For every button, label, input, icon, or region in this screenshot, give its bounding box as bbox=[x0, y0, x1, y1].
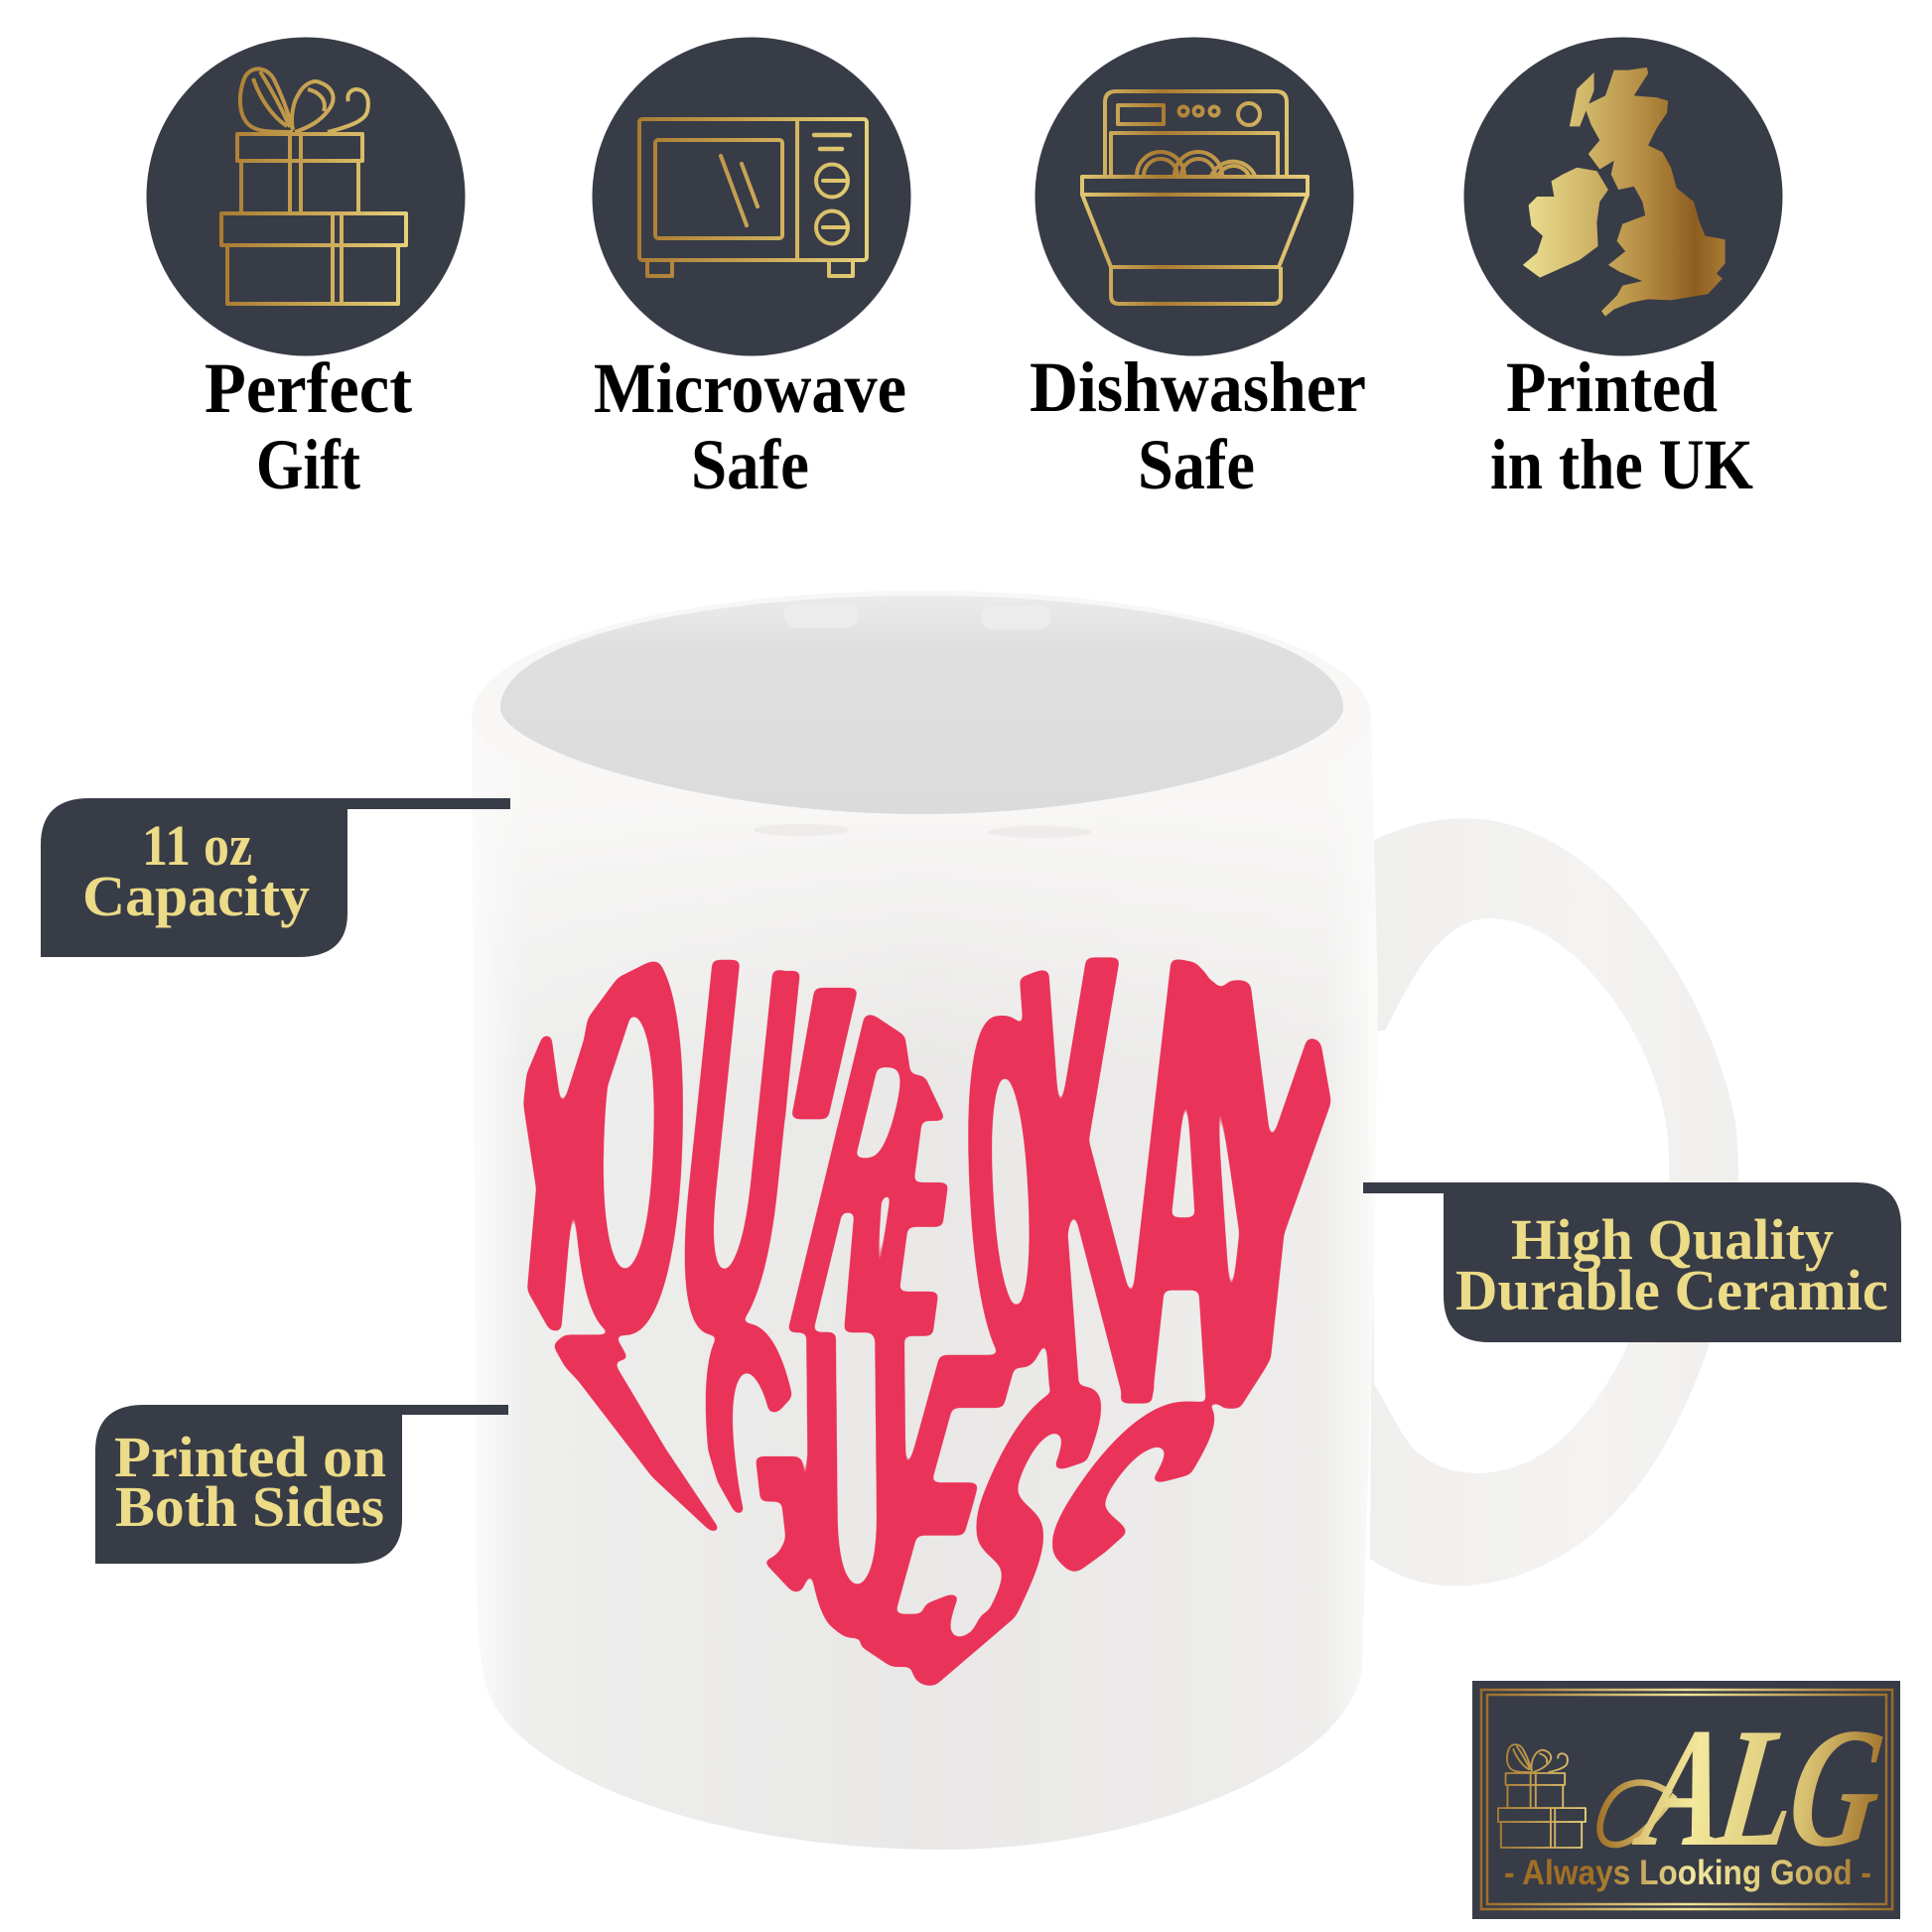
icon circle: microwave safe bbox=[592, 38, 911, 355]
callout: high quality durable ceramic bbox=[1363, 1182, 1901, 1342]
heart lettering: YOU'RE OKAY I GUESS: R bbox=[760, 914, 971, 1429]
mug photo bbox=[472, 591, 1738, 1850]
heart lettering: YOU'RE OKAY I GUESS: I bbox=[491, 1275, 780, 1591]
logo double frame bbox=[1481, 1690, 1892, 1909]
mug handle bbox=[1370, 818, 1738, 1587]
rim bbox=[472, 591, 1371, 826]
label: Perfect Gift bbox=[205, 348, 412, 504]
interior highlights bbox=[784, 604, 1050, 629]
heart lettering: YOU'RE OKAY I GUESS: E bbox=[823, 1258, 1047, 1760]
icon: dishwasher bbox=[1082, 91, 1308, 304]
icon circle: dishwasher safe bbox=[1035, 38, 1354, 355]
callout: 11 oz capacity bbox=[41, 798, 510, 957]
heart lettering: YOU'RE OKAY I GUESS: E bbox=[859, 997, 977, 1415]
rim highlights bbox=[754, 824, 1091, 838]
label: Microwave Safe bbox=[594, 348, 906, 504]
callout: 11 oz capacity: Capacity bbox=[82, 864, 310, 928]
label: Dishwasher Safe: Safe bbox=[1138, 425, 1255, 504]
label: Microwave Safe: Safe bbox=[691, 425, 809, 504]
heart lettering: YOU'RE OKAY I GUESS: K bbox=[1003, 824, 1162, 1523]
logo: Always Looking Good bbox=[1472, 1681, 1900, 1919]
callout: printed on both sides: Printed on bbox=[114, 1425, 386, 1489]
label: Dishwasher Safe: Dishwasher bbox=[1030, 347, 1366, 427]
callout: printed on both sides: Both Sides bbox=[115, 1474, 384, 1539]
label: Microwave Safe: Microwave bbox=[594, 348, 906, 428]
upper body highlight bbox=[472, 591, 1378, 1072]
icon circle: perfect gift bbox=[147, 38, 465, 355]
heart lettering: YOU'RE OKAY I GUESS: U bbox=[800, 1241, 913, 1725]
logo tagline: - Always Looking Good - bbox=[1504, 1854, 1871, 1892]
heart lettering: YOU'RE OKAY I GUESS: S bbox=[868, 1318, 1306, 1775]
heart lettering: YOU'RE OKAY I GUESS: ' bbox=[711, 877, 890, 1453]
heart lettering: YOU'RE OKAY I GUESS: Y bbox=[1144, 847, 1389, 1539]
logo monogram: ALG bbox=[1626, 1693, 1894, 1882]
logo flourish bbox=[1599, 1783, 1675, 1845]
icon circle: printed in the UK bbox=[1463, 38, 1783, 355]
label: Perfect Gift: Gift bbox=[256, 425, 360, 504]
callout: high quality durable ceramic: High Quality bbox=[1511, 1207, 1834, 1272]
icon: UK and Ireland map bbox=[1523, 68, 1725, 317]
label: Printed in the UK: in the UK bbox=[1490, 425, 1753, 504]
heart lettering: YOU'RE OKAY I GUESS: G bbox=[683, 1244, 831, 1688]
logo gift icon bbox=[1498, 1744, 1586, 1848]
label: Printed in the UK bbox=[1490, 347, 1753, 504]
label: Printed in the UK: Printed bbox=[1506, 347, 1718, 427]
heart lettering: YOU'RE OKAY I GUESS: A bbox=[1117, 821, 1251, 1540]
label: Dishwasher Safe bbox=[1030, 347, 1366, 504]
heart lettering: YOU'RE OKAY I GUESS: Y bbox=[464, 867, 651, 1443]
icon: stacked gift boxes bbox=[221, 69, 406, 304]
callout: high quality durable ceramic: Durable Ceramic bbox=[1455, 1258, 1888, 1322]
icon: microwave bbox=[639, 119, 867, 276]
heart lettering: YOU'RE OKAY I GUESS: S bbox=[847, 1302, 1166, 1770]
callout: 11 oz capacity: 11 oz bbox=[142, 813, 252, 878]
mug body bbox=[472, 591, 1378, 1850]
label: Perfect Gift: Perfect bbox=[205, 348, 412, 428]
heart lettering: YOU'RE OKAY I GUESS: U bbox=[658, 846, 817, 1443]
callout: printed on both sides bbox=[95, 1405, 508, 1564]
heart lettering: YOU'RE OKAY I GUESS: O bbox=[955, 916, 1066, 1467]
heart lettering: YOU'RE OKAY I GUESS: O bbox=[564, 839, 694, 1444]
mug interior bbox=[500, 596, 1343, 814]
heart lettering: YOU'RE OKAY I GUESS bbox=[523, 957, 1330, 1686]
